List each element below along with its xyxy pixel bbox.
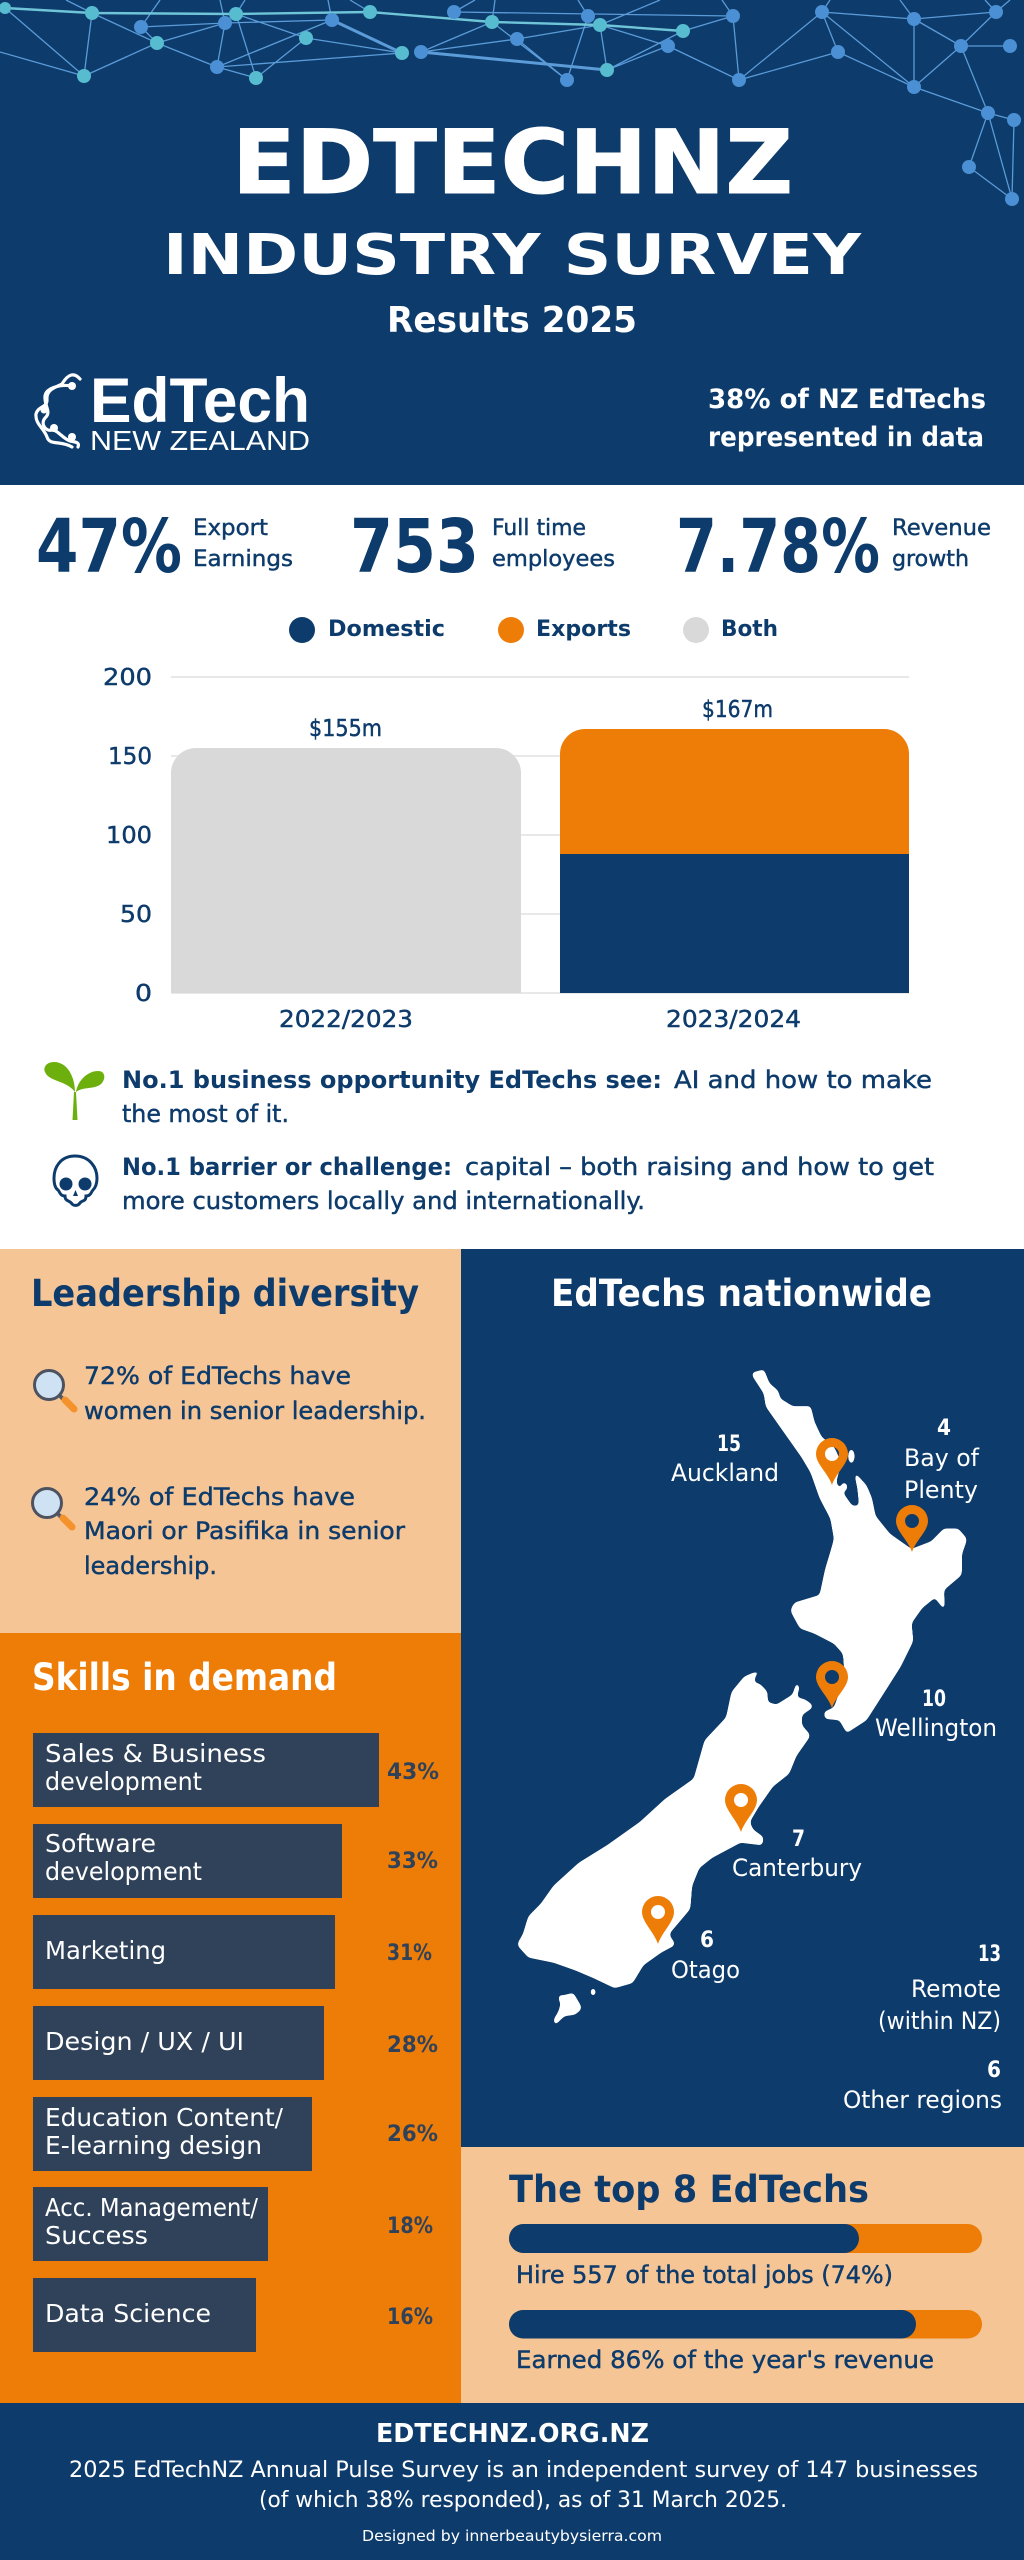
text: opportunity xyxy=(122,1066,932,1128)
bar: 2022/2023: $155m xyxy=(309,716,382,742)
bar: software: 33% xyxy=(387,1849,438,1874)
label: Remote: Remote xyxy=(911,1975,1001,2003)
heading: Leadership diversity xyxy=(31,1272,419,1315)
bar: sales xyxy=(33,1733,439,1807)
label: Otago: 6 xyxy=(700,1928,714,1953)
bar: account management xyxy=(33,2187,433,2261)
text: maori or pasifika xyxy=(84,1483,405,1580)
icon: sprout xyxy=(44,1062,104,1120)
bar chart: 150 xyxy=(108,744,152,770)
label: Auckland: Auckland xyxy=(671,1459,779,1487)
bar: data science xyxy=(33,2278,433,2352)
panel: the top 8 edtechs xyxy=(461,2147,1024,2403)
results year: Results 2025 xyxy=(387,300,637,341)
bar: education xyxy=(33,2097,438,2171)
text: revenue: Earned 86% of the year's revenue xyxy=(516,2346,934,2374)
bar: education: Education Content/ xyxy=(45,2103,284,2132)
heading: Skills in demand xyxy=(32,1656,337,1699)
bar: marketing xyxy=(33,1915,432,1989)
label: Remote: 13 xyxy=(978,1942,1001,1967)
bar: account management: 18% xyxy=(387,2214,433,2239)
text: opportunity: No.1 business opportunity EdTechs see: xyxy=(122,1066,662,1094)
bar: software: development xyxy=(45,1857,202,1886)
text: opportunity: the most of it. xyxy=(122,1100,289,1128)
bar chart: 200 xyxy=(103,665,152,691)
panel: skills in demand xyxy=(0,1633,461,2403)
label: Canterbury xyxy=(732,1827,862,1882)
label: Otago: Otago xyxy=(671,1956,740,1984)
text: barrier: No.1 barrier or challenge: xyxy=(122,1153,452,1181)
chart legend: Exports xyxy=(536,617,631,642)
logo xyxy=(36,366,310,456)
text: opportunity: AI and how to make xyxy=(674,1066,932,1094)
bar: 2023/2024: $167m xyxy=(702,697,773,723)
representation note: 38% of NZ EdTechs xyxy=(708,384,986,415)
label: Bay of Plenty xyxy=(904,1416,980,1504)
stat: export earnings xyxy=(36,504,293,590)
text: women in leadership: 72% of EdTechs have xyxy=(84,1362,351,1390)
bar: account management: Acc. Management/ xyxy=(45,2193,259,2222)
bar: account management: Success xyxy=(45,2221,148,2250)
stat: revenue growth: growth xyxy=(892,547,969,572)
survey note: 2025 EdTechNZ Annual Pulse Survey is an independent survey of 147 businesses xyxy=(69,2457,978,2483)
survey note xyxy=(69,2457,978,2513)
icon: magnifier xyxy=(34,1370,74,1409)
text: women in leadership: women in senior leadership. xyxy=(84,1397,426,1425)
panel: edtechs nationwide xyxy=(461,1249,1024,2147)
label: Auckland: 15 xyxy=(717,1432,741,1457)
map of New Zealand xyxy=(517,1370,967,2025)
heading: The top 8 EdTechs xyxy=(509,2168,869,2211)
network decoration xyxy=(0,0,1021,206)
pin: Auckland xyxy=(816,1438,848,1485)
bar: software: Software xyxy=(45,1829,156,1858)
stat: export earnings: Export xyxy=(193,516,268,541)
pin: Wellington xyxy=(816,1661,848,1708)
bar: software xyxy=(33,1824,438,1898)
bar: marketing: 31% xyxy=(387,1941,432,1966)
credit: Designed by innerbeautybysierra.com xyxy=(362,2527,662,2545)
website: EDTECHNZ.ORG.NZ xyxy=(376,2419,649,2449)
bar: 2022/2023: 2022/2023 xyxy=(279,1007,413,1033)
text: women in leadership xyxy=(84,1362,426,1425)
bar: design: 28% xyxy=(387,2033,438,2058)
text: barrier: capital – both raising and how to get xyxy=(465,1153,934,1181)
label: Bay of Plenty: Plenty xyxy=(904,1476,978,1504)
panel: footer xyxy=(0,2403,1024,2560)
bar chart: 0 xyxy=(135,981,152,1007)
bar: data science: Data Science xyxy=(45,2299,211,2328)
label: Canterbury: 7 xyxy=(792,1827,805,1852)
bar: sales: 43% xyxy=(387,1760,439,1785)
label: Bay of Plenty: Bay of xyxy=(904,1444,980,1472)
label: Bay of Plenty: 4 xyxy=(937,1416,951,1441)
label: Other regions xyxy=(843,2058,1002,2114)
icon: magnifier xyxy=(32,1488,72,1527)
stat: employees: 753 xyxy=(350,504,479,590)
bar: marketing: Marketing xyxy=(45,1936,166,1965)
bar: 2023/2024 xyxy=(560,697,909,1033)
survey note: (of which 38% responded), as of 31 March 2025. xyxy=(259,2487,787,2513)
text: maori or pasifika: 24% of EdTechs have xyxy=(84,1483,355,1511)
heading: EdTechs nationwide xyxy=(551,1272,932,1315)
chart legend xyxy=(289,617,778,643)
progress bar: revenue xyxy=(509,2310,982,2338)
bar: design: Design / UX / UI xyxy=(45,2027,244,2056)
bar: data science: 16% xyxy=(387,2305,433,2330)
bar: education: E-learning design xyxy=(45,2131,262,2160)
logo: NEW ZEALAND xyxy=(90,425,310,456)
title: EDTECHNZ xyxy=(232,111,793,214)
bar chart xyxy=(103,665,909,1033)
logo: EdTech xyxy=(90,366,310,436)
text: maori or pasifika: Maori or Pasifika in senior xyxy=(84,1517,405,1545)
stat: export earnings: 47% xyxy=(36,504,182,590)
bar: 2022/2023 xyxy=(171,716,521,1033)
bar chart: 100 xyxy=(106,823,152,849)
label: Remote xyxy=(878,1942,1001,2035)
icon: skull xyxy=(54,1156,97,1205)
text: barrier: more customers locally and internationally. xyxy=(122,1187,645,1215)
bar chart: 50 xyxy=(120,902,152,928)
text: jobs: Hire 557 of the total jobs (74%) xyxy=(516,2261,893,2289)
panel: leadership diversity xyxy=(0,1249,461,1633)
stat: employees: employees xyxy=(492,547,615,572)
pin: Bay of Plenty xyxy=(896,1505,928,1552)
bar: sales: Sales & Business xyxy=(45,1739,266,1768)
text: barrier xyxy=(122,1153,934,1215)
label: Wellington xyxy=(875,1687,997,1742)
text: maori or pasifika: leadership. xyxy=(84,1552,217,1580)
chart legend: Both xyxy=(721,617,778,642)
pin: Otago xyxy=(642,1896,674,1944)
label: Other regions: 6 xyxy=(987,2058,1001,2083)
bar: design xyxy=(33,2006,438,2080)
label: Other regions: Other regions xyxy=(843,2086,1002,2114)
subtitle: INDUSTRY SURVEY xyxy=(163,223,863,288)
label: Canterbury: Canterbury xyxy=(732,1854,862,1882)
stat: revenue growth: Revenue xyxy=(892,516,991,541)
bar: 2023/2024: 2023/2024 xyxy=(666,1007,801,1033)
stat: revenue growth: 7.78% xyxy=(676,504,880,590)
stat: export earnings: Earnings xyxy=(193,547,293,572)
representation note: represented in data xyxy=(708,422,984,453)
representation note xyxy=(708,384,986,453)
progress bar: jobs xyxy=(509,2224,982,2253)
bar: sales: development xyxy=(45,1767,202,1796)
label: Remote: (within NZ) xyxy=(878,2007,1001,2035)
bar: education: 26% xyxy=(387,2122,438,2147)
label: Wellington: Wellington xyxy=(875,1714,997,1742)
pin: Canterbury xyxy=(725,1784,757,1832)
chart legend: Domestic xyxy=(328,617,445,642)
stat: employees: Full time xyxy=(492,516,586,541)
stat: employees xyxy=(350,504,615,590)
label: Wellington: 10 xyxy=(922,1687,946,1712)
panel: header xyxy=(0,0,1024,485)
label: Otago xyxy=(671,1928,740,1984)
label: Auckland xyxy=(671,1432,779,1487)
